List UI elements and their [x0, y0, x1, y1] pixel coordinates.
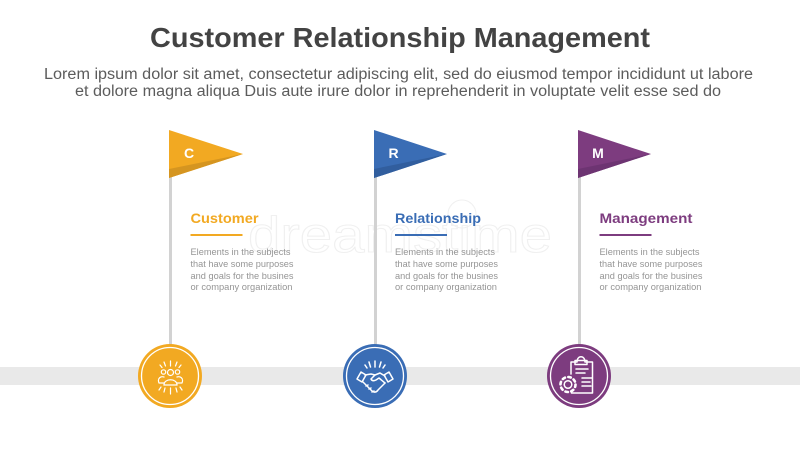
flag: management: M: [592, 145, 604, 161]
panel: customer: [138, 130, 294, 408]
flag: customer: [169, 130, 243, 178]
flag pole: relationship: [374, 176, 377, 346]
description: management: Elements in the subjects: [600, 247, 700, 258]
description: customer: Elements in the subjects: [190, 247, 291, 258]
subtitle text block: [44, 66, 753, 100]
icon: team: [158, 361, 183, 394]
heading: management: Management: [600, 211, 693, 226]
timeline band: [0, 367, 800, 385]
underline: management: [600, 234, 652, 236]
description: relationship: [395, 247, 498, 293]
description: relationship: Elements in the subjects: [395, 247, 495, 258]
flag pole: management: [578, 176, 581, 346]
node: relationship: [343, 344, 407, 408]
description: management: that have some purposes: [600, 259, 703, 270]
description: customer: and goals for the busines: [190, 271, 294, 282]
description: management: or company organization: [600, 282, 702, 293]
description: relationship: or company organization: [395, 282, 497, 293]
description: customer: that have some purposes: [190, 259, 294, 270]
description: relationship: that have some purposes: [395, 259, 498, 270]
title: Customer Relationship Management: [150, 22, 650, 53]
heading: customer: Customer: [190, 211, 259, 226]
flag pole: customer: [169, 176, 172, 346]
node: management: [547, 344, 611, 408]
description: management: and goals for the busines: [600, 271, 703, 282]
underline: relationship: [395, 234, 447, 236]
description: customer: or company organization: [190, 282, 292, 293]
flag: customer: C: [184, 145, 194, 161]
heading: relationship: Relationship: [395, 211, 481, 226]
subtitle text block: et dolore magna aliqua Duis aute irure dolor in reprehenderit in voluptate velit esse sed do: [75, 83, 721, 100]
icon: handshake: [357, 361, 393, 392]
description: relationship: and goals for the busines: [395, 271, 498, 282]
node: customer: [138, 344, 202, 408]
watermark: dreamstime: [248, 207, 552, 263]
flag: management: [578, 130, 651, 178]
icon: clipboard and gear: [560, 357, 592, 393]
panel: management: [547, 130, 703, 408]
subtitle text block: Lorem ipsum dolor sit amet, consectetur adipiscing elit, sed do eiusmod tempor incididunt ut labore: [44, 66, 753, 83]
flag: relationship: [374, 130, 447, 178]
flag: relationship: R: [388, 145, 399, 161]
panel: relationship: [343, 130, 498, 408]
underline: customer: [190, 234, 242, 236]
description: management: [600, 247, 703, 293]
description: customer: [190, 247, 294, 293]
